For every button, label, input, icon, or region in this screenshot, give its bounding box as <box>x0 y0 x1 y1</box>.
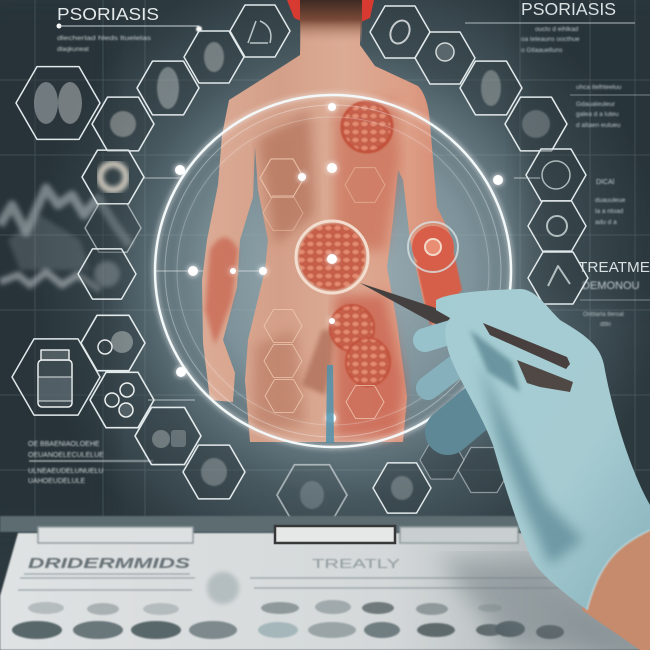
clipboard paper panel: TREATLY <box>312 556 400 571</box>
rear fingers <box>448 402 484 432</box>
hexagon: faint lower mid <box>420 441 464 479</box>
hexagon: vessel <box>526 149 586 201</box>
hexagon: oval <box>137 61 199 115</box>
title: right psoriasis: adu d a <box>595 219 617 226</box>
title: right psoriasis: o Gtlaauelluns <box>521 47 563 54</box>
hexagon: droplet <box>415 32 475 84</box>
hexagon network <box>12 5 588 525</box>
title: right psoriasis: uhca itelhteeluu <box>576 84 622 91</box>
label: treatment <box>578 259 650 328</box>
hexagon: cell <box>184 31 244 83</box>
main hand <box>436 289 650 610</box>
clipboard paper panel <box>0 516 650 650</box>
neck and upper back with arms <box>202 0 460 442</box>
pen body held <box>483 323 573 392</box>
title: right psoriasis: DICAl <box>596 179 615 186</box>
gloved hand <box>425 289 650 610</box>
hexagon: bottom right <box>373 463 431 513</box>
palm shadow <box>478 360 583 565</box>
hexagon: ring lesion <box>82 150 144 204</box>
ears <box>287 0 374 22</box>
caption: lower left text <box>28 441 153 485</box>
lesions: right back spread <box>335 100 400 250</box>
title: left psoriasis: PSORIASIS <box>57 4 159 24</box>
cuff edge <box>587 530 650 610</box>
title: right psoriasis: Gdaualeuleur <box>576 101 616 108</box>
document figure <box>207 572 239 604</box>
centre blue stripe <box>326 365 334 443</box>
lesion: hip plaque upper <box>330 305 374 351</box>
hexagon: faint <box>85 204 141 252</box>
hexagon: mixed icon <box>135 407 201 465</box>
hair <box>300 0 362 44</box>
chart: blurred line chart left <box>0 188 130 290</box>
lesions: right forearm <box>416 245 462 325</box>
label: treatment: TREATME <box>578 259 650 276</box>
forearm skin <box>582 522 650 650</box>
hexagon: lesion <box>78 249 136 299</box>
title: left psoriasis: dlecherlad hleds ltuelelas <box>57 35 152 42</box>
centre magnifier lesion <box>296 221 368 293</box>
arm lesion target <box>408 222 458 272</box>
title: right psoriasis: d altaen eulueu <box>576 122 621 129</box>
glove shadow on paper <box>440 560 640 650</box>
title: right psoriasis: ouclo d eihlkad <box>535 26 579 33</box>
clip bars <box>38 527 193 543</box>
figure: person's back <box>202 0 462 442</box>
connector lines <box>144 0 540 440</box>
hexagon: outline <box>528 201 586 251</box>
label: treatment: DEMONOU <box>582 280 640 292</box>
hexagon: tuft <box>92 97 154 151</box>
hexagon: pills <box>90 372 154 428</box>
title: right psoriasis <box>465 0 650 226</box>
hexagon: top centre right <box>370 6 430 58</box>
hexagon: lower left <box>183 445 245 499</box>
hexagon: tissue <box>460 61 522 115</box>
caption: lower left text: ULNEAEUDELUNUELU <box>28 468 103 475</box>
hexagon: faint lower right <box>458 447 510 493</box>
hexagon overlay on skin <box>260 159 385 418</box>
lesion: hip plaque lower <box>346 338 390 386</box>
clipboard clip <box>275 526 395 543</box>
pen tip <box>360 283 452 328</box>
title: left psoriasis: dlaqkuneat <box>57 46 89 53</box>
title: right psoriasis: galea d a luteu <box>576 111 619 118</box>
label: treatment: dtlln <box>600 322 611 328</box>
label: treatment: Onblarla tleroal <box>583 312 624 318</box>
document heading: DRIDERMMIDS <box>28 555 190 572</box>
bottom text line <box>255 646 620 648</box>
caption: lower left text: OEUANOELECULELUE <box>28 452 104 459</box>
glowing ring <box>155 95 511 447</box>
back shading <box>258 110 315 245</box>
caption: lower left text: OE BBAENIAOLOEHE <box>28 441 100 448</box>
title: right psoriasis: oa teleauns oocthue <box>521 36 580 43</box>
title: right psoriasis: la a nload <box>595 208 624 215</box>
document thumbnails <box>12 600 564 639</box>
hexagon: right lower <box>528 252 588 304</box>
title: left psoriasis <box>56 4 202 53</box>
lesion: shoulder plaque <box>342 102 392 152</box>
caption: lower left text: UAHOEUDELULE <box>28 478 86 485</box>
hexagon: medicine bottle <box>12 339 100 415</box>
hexagon: top left <box>230 5 290 57</box>
title: right psoriasis: duauuleue <box>595 197 626 204</box>
hexagon: scales <box>505 97 567 151</box>
hexagon: capsules <box>81 315 145 371</box>
hexagon: bottom centre <box>277 465 347 525</box>
document lines <box>18 574 565 590</box>
lesions: left arm <box>205 238 238 345</box>
node dots <box>175 103 503 423</box>
hexagon: left big with leaves <box>16 67 100 139</box>
